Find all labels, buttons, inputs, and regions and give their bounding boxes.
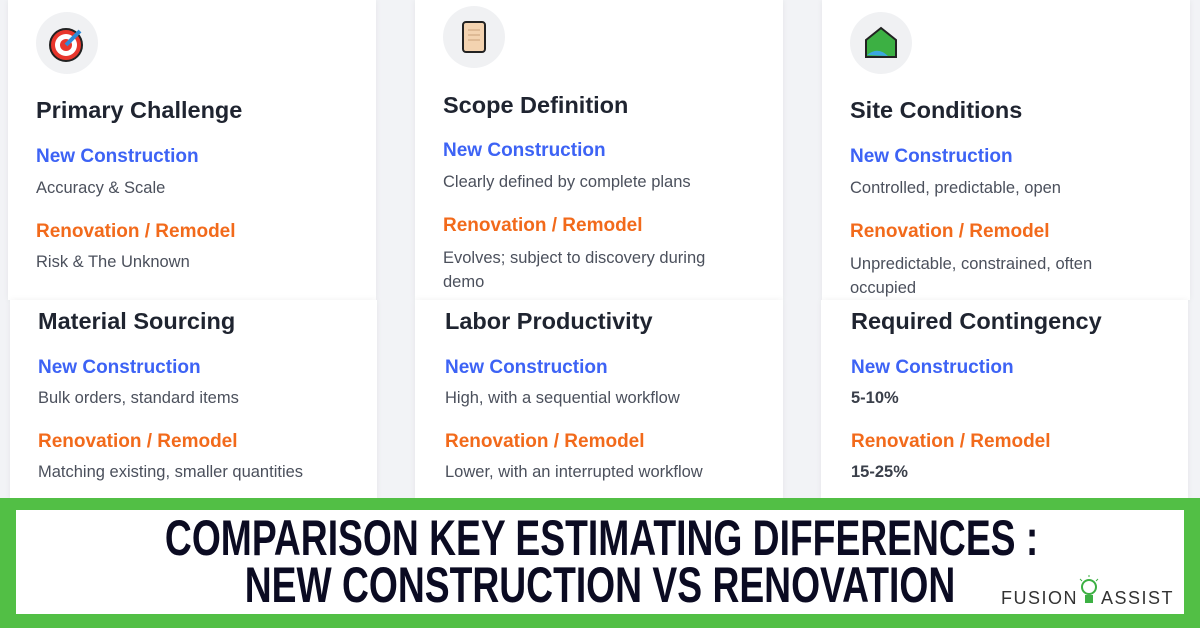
text: High, with a sequential workflow xyxy=(445,389,680,407)
heading: Labor Productivity xyxy=(445,308,653,334)
heading: Material Sourcing xyxy=(38,308,235,334)
label: renovation: Renovation / Remodel xyxy=(36,221,236,242)
text: Risk & The Unknown xyxy=(36,253,190,271)
text: Clearly defined by complete plans xyxy=(443,173,691,191)
text: Bulk orders, standard items xyxy=(38,389,239,407)
icon: target xyxy=(36,12,98,74)
label: new construction: New Construction xyxy=(850,146,1013,167)
heading: Scope Definition xyxy=(443,92,628,118)
heading: Primary Challenge xyxy=(36,97,242,123)
text: Unpredictable, constrained, often occupied xyxy=(850,255,1092,297)
label: renovation: Renovation / Remodel xyxy=(38,431,238,452)
icon: landscape xyxy=(850,12,912,74)
label: new construction: New Construction xyxy=(445,357,608,378)
logo: FUSION xyxy=(1001,588,1078,608)
label: renovation: Renovation / Remodel xyxy=(445,431,645,452)
label: renovation: Renovation / Remodel xyxy=(851,431,1051,452)
text: Controlled, predictable, open xyxy=(850,179,1061,197)
panel: labor productivity xyxy=(415,300,783,500)
panel: scope definition xyxy=(415,0,783,300)
heading: Required Contingency xyxy=(851,308,1102,334)
label: renovation: Renovation / Remodel xyxy=(850,221,1050,242)
logo xyxy=(1001,575,1174,608)
text: 15-25% xyxy=(851,463,908,481)
label: new construction: New Construction xyxy=(851,357,1014,378)
title xyxy=(165,510,1038,613)
panel: material sourcing xyxy=(10,300,377,500)
icon: bulb xyxy=(1080,575,1098,603)
text: Matching existing, smaller quantities xyxy=(38,463,303,481)
title: NEW CONSTRUCTION VS RENOVATION xyxy=(245,557,955,613)
text: Lower, with an interrupted workflow xyxy=(445,463,703,481)
logo: ASSIST xyxy=(1101,588,1174,608)
panel: site conditions xyxy=(822,0,1190,300)
label: new construction: New Construction xyxy=(443,140,606,161)
label: new construction: New Construction xyxy=(38,357,201,378)
icon: scroll xyxy=(443,6,505,68)
text: 5-10% xyxy=(851,389,899,407)
title: COMPARISON KEY ESTIMATING DIFFERENCES : xyxy=(165,510,1038,566)
label: new construction: New Construction xyxy=(36,146,199,167)
heading: Site Conditions xyxy=(850,97,1022,123)
text: Evolves; subject to discovery during demo xyxy=(443,249,705,291)
label: renovation: Renovation / Remodel xyxy=(443,215,643,236)
panel: primary challenge xyxy=(8,0,376,300)
panel: required contingency xyxy=(821,300,1188,500)
title banner xyxy=(0,498,1200,628)
text: Accuracy & Scale xyxy=(36,179,165,197)
